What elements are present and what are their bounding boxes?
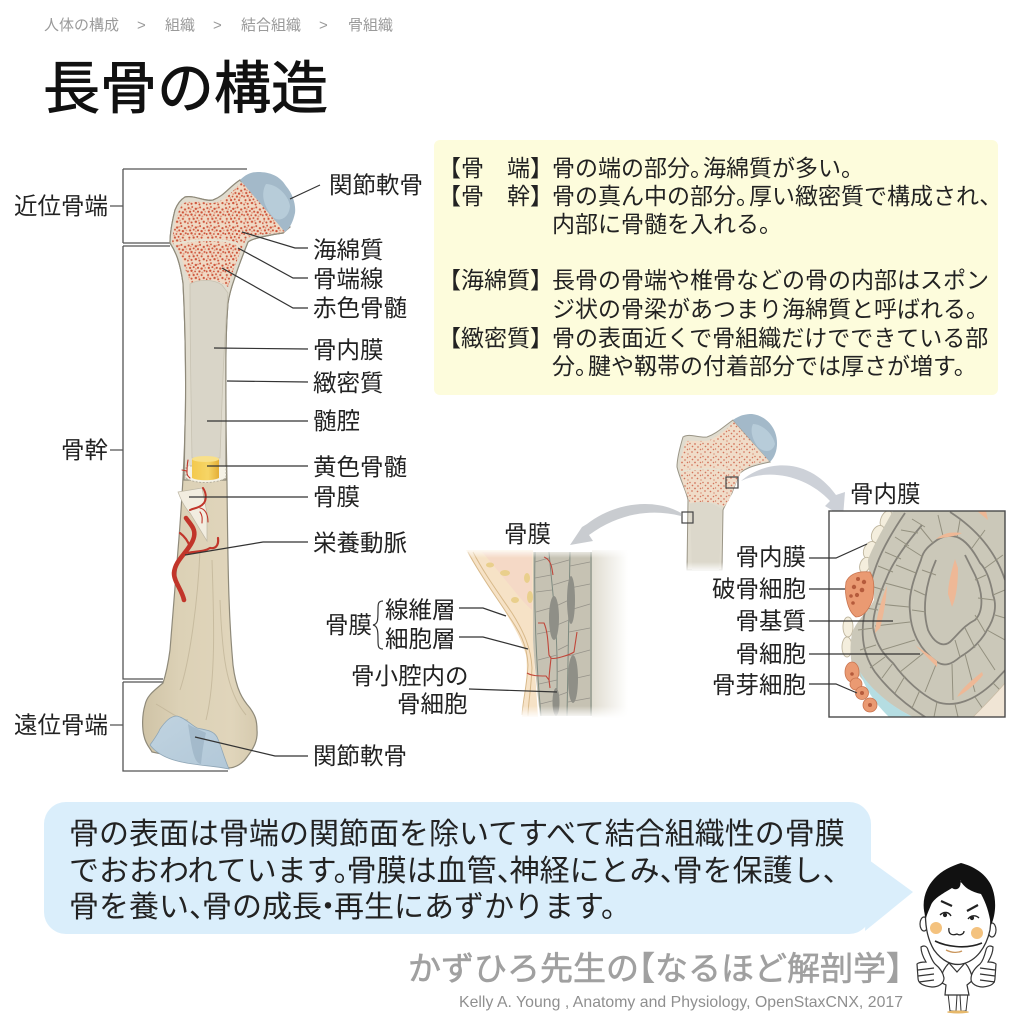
nose and mouth (935, 928, 982, 952)
term: 海綿質: 長骨の骨端や椎骨などの骨の内部はスポン (552, 267, 989, 293)
term: 骨端: 骨の端の部分。海綿質が多い。 (552, 155, 864, 181)
breadcrumb: 骨組織 (348, 17, 393, 34)
face (925, 880, 991, 964)
term: 骨幹: 骨の真ん中の部分。厚い緻密質で構成され、 (552, 183, 1002, 209)
inset labels: 破骨細胞 (712, 576, 806, 602)
breadcrumb: 組織 (165, 17, 195, 34)
periosteum labels: 骨細胞 (397, 691, 468, 717)
illustration: endosteum inset (829, 509, 1010, 720)
white fade top (466, 550, 620, 558)
periosteum labels: 骨膜 (325, 612, 372, 638)
osteoblasts (845, 662, 877, 712)
illustration: periosteum section (466, 550, 622, 716)
term: 海綿質: 【海綿質】 (438, 267, 553, 293)
inset labels: 骨芽細胞 (712, 672, 806, 698)
part labels: 関節軟骨 (329, 172, 423, 198)
hair (924, 863, 995, 925)
inset labels: 骨基質 (736, 608, 806, 634)
shadow (947, 1010, 969, 1014)
inset labels: 骨内膜 (736, 544, 806, 570)
term: 海綿質: ジ状の骨梁があつまり海綿質と呼ばれる。 (552, 296, 989, 322)
inset frame (829, 511, 1005, 717)
part labels: 赤色骨髄 (313, 295, 407, 321)
region labels (14, 193, 108, 738)
periosteum flap (178, 488, 207, 541)
spongy bone (172, 182, 285, 287)
term: 緻密質: 骨の表面近くで骨組織だけでできている部 (552, 325, 988, 351)
heading: 骨膜: 骨膜 (504, 521, 551, 547)
part labels: 緻密質 (313, 370, 384, 396)
nutrient artery (174, 460, 218, 600)
part labels: 髄腔 (313, 408, 360, 434)
footer brand: かずひろ先生の【なるほど解剖学】 (408, 950, 919, 987)
column fade (592, 550, 622, 716)
cartilage shading (188, 724, 206, 764)
bubble text: でおおわれています。骨膜は血管、神経にとみ、骨を保護し、 (69, 855, 853, 888)
breadcrumb: 人体の構成 (44, 17, 119, 34)
part labels: 関節軟骨 (313, 743, 407, 769)
marker: periosteum (682, 512, 693, 523)
eyes and brows (940, 901, 979, 919)
lamellae (863, 512, 1010, 720)
small cartilage highlight (752, 424, 775, 451)
term: 骨端: 【骨端】 (438, 155, 553, 181)
part labels: 骨内膜 (313, 337, 384, 363)
term: 骨幹 (438, 183, 1002, 237)
fade at cut end (684, 562, 726, 572)
character: doctor (917, 863, 996, 1014)
term: 海綿質 (438, 267, 989, 322)
part labels: 骨端線 (313, 266, 384, 292)
canaliculi (858, 515, 1005, 717)
pink layer (488, 557, 532, 610)
osteocytes (549, 576, 578, 716)
part labels (313, 172, 423, 769)
panel: definitions (434, 140, 1002, 395)
legs (948, 993, 968, 1011)
osteoclast (845, 572, 874, 617)
region brackets (110, 169, 247, 771)
bubble tail (865, 860, 913, 931)
term: 骨幹: 【骨幹】 (438, 183, 553, 209)
brace (373, 601, 383, 649)
breadcrumb (44, 17, 393, 34)
illustration: long bone (143, 172, 295, 769)
fibrous layer lines (468, 552, 532, 716)
periosteum labels: 線維層 (385, 597, 456, 623)
epiphyseal line (174, 240, 240, 248)
upper bone shell (170, 180, 283, 480)
left hand (917, 946, 944, 987)
part labels: 骨膜 (313, 484, 360, 510)
illustration: small femur head (677, 414, 777, 572)
region labels: 遠位骨端 (14, 712, 108, 738)
part labels: 栄養動脈 (313, 530, 407, 556)
proximal articular cartilage (240, 172, 295, 232)
periosteum labels: 骨小腔内の (351, 663, 468, 689)
distal articular cartilage (150, 716, 229, 769)
small cavity (690, 502, 722, 570)
bone columns (533, 552, 592, 716)
periosteum labels (325, 597, 468, 717)
term: 緻密質 (438, 325, 988, 379)
bubble text: 骨の表面は骨端の関節面を除いてすべて結合組織性の骨膜 (69, 818, 845, 851)
title: 長骨の構造 (43, 57, 328, 121)
yellow bone marrow (186, 456, 226, 482)
small epiphyseal line (680, 469, 732, 472)
yellow cells (486, 562, 533, 603)
lamella lines (535, 552, 591, 716)
term: 骨幹: 内部に骨髄を入れる。 (552, 211, 782, 237)
part labels: 海綿質 (313, 237, 384, 263)
lining cells (842, 509, 894, 657)
fine striations (535, 558, 590, 704)
white fade bottom (522, 707, 622, 718)
periosteum labels: 細胞層 (385, 626, 456, 652)
arrow to periosteum (570, 504, 681, 545)
osteocyte lacunae (875, 511, 988, 697)
bone matrix (850, 512, 1004, 716)
cartilage highlight (263, 184, 290, 220)
leader lines (185, 185, 320, 756)
blue osteoid layer (860, 672, 913, 717)
cheeks (930, 922, 942, 934)
inset labels: 骨細胞 (736, 641, 806, 667)
corner tissue (973, 683, 1005, 717)
medullary cavity (190, 280, 228, 458)
soft tissue (466, 550, 538, 717)
term: 緻密質: 【緻密質】 (438, 325, 553, 351)
bone body (143, 180, 290, 768)
inset labels (712, 544, 806, 698)
region labels: 骨幹 (61, 437, 108, 463)
periosteum leaders (459, 608, 557, 692)
arrow to endosteum (741, 465, 845, 517)
bubble text: 骨を養い、骨の成長・再生にあずかります。 (69, 891, 631, 924)
term: 緻密質: 分。腱や靱帯の付着部分では厚さが増す。 (552, 353, 977, 379)
part labels: 黄色骨髄 (313, 454, 407, 480)
small spongy bone (680, 422, 769, 507)
breadcrumb: 結合組織 (241, 17, 301, 34)
ears (920, 917, 928, 931)
marker: endosteum (726, 477, 738, 488)
small cartilage (733, 414, 777, 462)
breadcrumb: > (213, 17, 222, 34)
breadcrumb: > (319, 17, 328, 34)
shaft streaks (156, 550, 246, 720)
inset leader lines (809, 544, 920, 693)
source credit: Kelly A. Young , Anatomy and Physiology, OpenStaxCNX, 2017 (459, 994, 903, 1011)
bubble text (69, 818, 853, 924)
region labels: 近位骨端 (14, 193, 108, 219)
heading: 骨内膜: 骨内膜 (850, 481, 920, 507)
blood vessels (527, 557, 577, 688)
coat (940, 963, 973, 995)
speech bubble (44, 802, 913, 934)
breadcrumb: > (137, 17, 146, 34)
small bone body (677, 420, 770, 570)
right hand (971, 946, 996, 987)
